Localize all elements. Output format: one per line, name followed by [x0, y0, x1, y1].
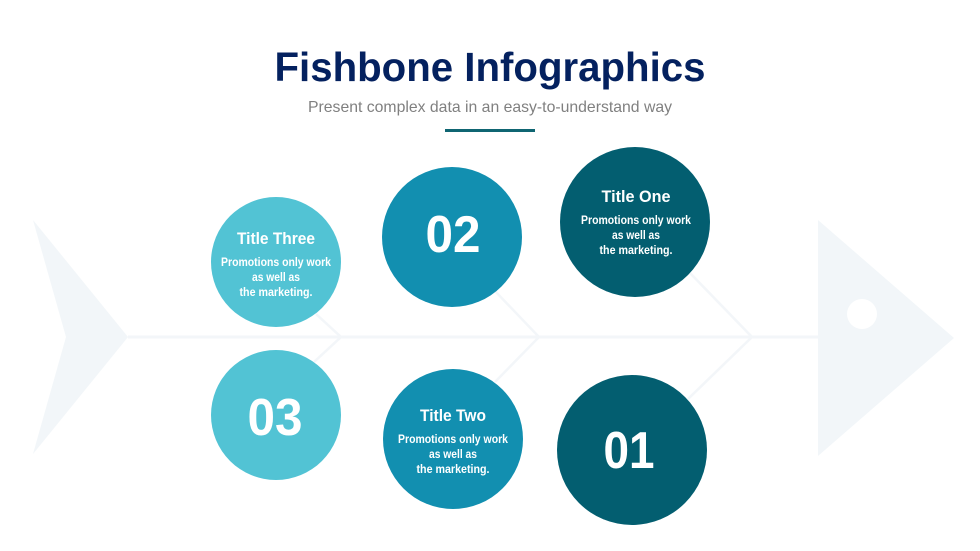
body text: Title Two: [398, 434, 509, 476]
heading: Title One: Title One: [602, 187, 670, 206]
body text: Title Three: [221, 257, 332, 299]
body text: Title Three: as well as: [252, 272, 300, 284]
body text: Title One: the marketing.: [600, 245, 672, 257]
body text: Title One: [581, 215, 692, 257]
circle: Title Three: [211, 197, 341, 327]
rib bones near head: [688, 273, 752, 399]
circle: 02: [382, 167, 522, 307]
fish eye: [847, 299, 877, 329]
fish head: [818, 220, 954, 456]
heading: Title Two: Title Two: [420, 406, 486, 425]
body text: Title Three: the marketing.: [240, 287, 312, 299]
body text: Title One: as well as: [612, 230, 660, 242]
title: Fishbone Infographics: [274, 44, 706, 90]
number 03: 03: [248, 389, 302, 447]
title underline accent: [445, 129, 535, 132]
body text: Title One: Promotions only work: [581, 215, 692, 227]
subtitle: Present complex data in an easy-to-understand way: [308, 99, 672, 116]
body text: Title Two: the marketing.: [416, 464, 490, 476]
number 02: 02: [426, 206, 480, 264]
circle: Title One: [560, 147, 710, 297]
body text: Title Three: Promotions only work: [221, 257, 332, 269]
body text: Title Two: Promotions only work: [398, 434, 509, 446]
rib bones middle: [495, 291, 539, 382]
circle: 01: [557, 375, 707, 525]
body text: Title Two: as well as: [429, 449, 477, 461]
circle: Title Two: [383, 369, 523, 509]
heading: Title Three: Title Three: [237, 229, 315, 248]
fish tail: [33, 220, 128, 454]
circle: 03: [211, 350, 341, 480]
rib bones near tail: [314, 314, 341, 362]
fish spine: [128, 336, 818, 338]
fishbone diagram background: [33, 220, 954, 456]
number 01: 01: [604, 422, 654, 480]
